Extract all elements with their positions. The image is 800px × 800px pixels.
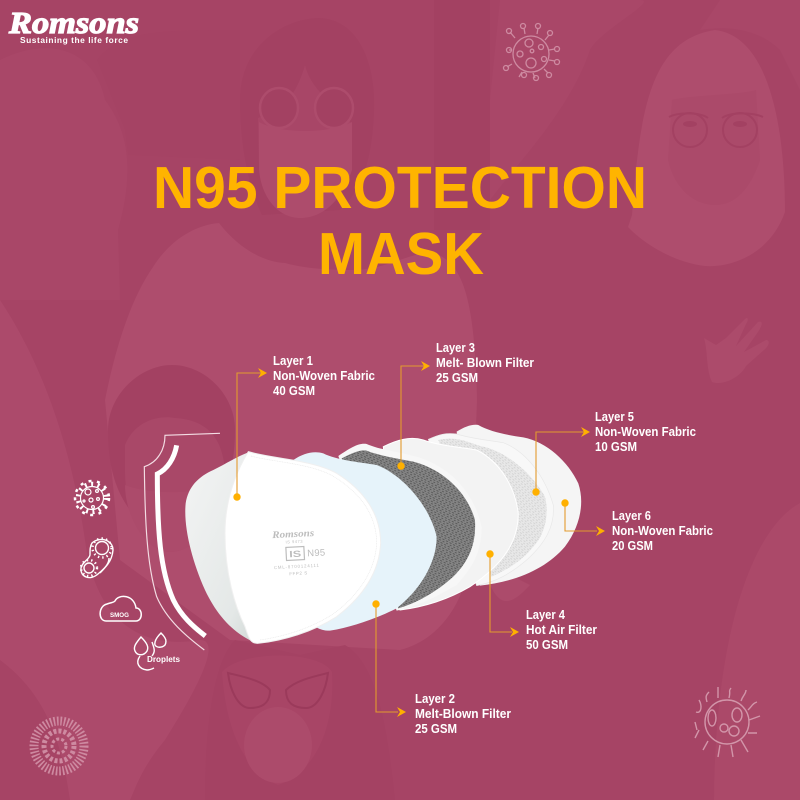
label: layer 5: Non-Woven Fabric	[595, 425, 696, 439]
label: layer 1: 40 GSM	[273, 384, 315, 398]
label: layer 2: 25 GSM	[415, 722, 457, 736]
label: layer 2: Melt-Blown Filter	[415, 707, 511, 721]
label: layer 4: Layer 4	[526, 608, 565, 622]
title	[153, 155, 647, 287]
layer 4	[383, 438, 518, 610]
label: layer 3: 25 GSM	[436, 371, 478, 385]
mask print: FFP2 S	[289, 570, 307, 576]
mask print: CML-8700124111	[274, 563, 320, 570]
label: layer 5: 10 GSM	[595, 440, 637, 454]
title: N95 PROTECTION	[153, 155, 647, 221]
central body	[105, 223, 477, 650]
title: MASK	[318, 221, 484, 287]
label: layer 6: 20 GSM	[612, 539, 653, 553]
layer 1	[185, 452, 381, 643]
icon: droplets	[134, 633, 181, 670]
logo: Sustaining the life force	[20, 35, 128, 45]
bottom woman	[205, 640, 395, 800]
virus icon bottom right	[695, 687, 760, 757]
leader lines	[237, 366, 597, 712]
label: layer 4	[526, 608, 597, 652]
virus icon top	[504, 24, 560, 80]
label: layer 4: 50 GSM	[526, 638, 568, 652]
label: layer 1	[273, 354, 375, 398]
layer 2	[293, 452, 437, 631]
exploded mask layers	[185, 425, 581, 643]
layer 3	[338, 444, 482, 611]
label: layer 1: Non-Woven Fabric	[273, 369, 375, 383]
icon: droplets: Droplets	[147, 655, 181, 664]
right woman	[628, 30, 785, 266]
layer 6	[457, 425, 581, 586]
mask print: N95	[307, 547, 325, 559]
mask print: Romsons	[271, 528, 315, 541]
shield outline	[144, 433, 220, 650]
central woman	[240, 18, 374, 215]
virus icon bottom left	[34, 721, 84, 771]
label: layer 4: Hot Air Filter	[526, 623, 597, 637]
label: layer 6	[612, 509, 713, 553]
afro person	[108, 365, 235, 510]
mask print: IS 9473	[285, 539, 303, 544]
label: layer 6: Non-Woven Fabric	[612, 524, 713, 538]
label: layer 3	[436, 341, 534, 385]
icon: smog cloud: SMOG	[110, 612, 129, 619]
label: layer 1: Layer 1	[273, 354, 313, 368]
label: layer 3: Melt- Blown Filter	[436, 356, 534, 370]
left lower body	[0, 300, 209, 800]
arrowheads	[258, 361, 605, 717]
label: layer 2: Layer 2	[415, 692, 455, 706]
layer 5	[428, 434, 553, 586]
icon: smog cloud	[100, 596, 141, 621]
label: layer 5	[595, 410, 696, 454]
icon: bacteria	[81, 538, 113, 578]
logo: Romsons	[8, 5, 139, 40]
leader dots	[233, 462, 569, 608]
icon: virus	[75, 481, 109, 515]
hand	[704, 318, 769, 383]
label: layer 6: Layer 6	[612, 509, 651, 523]
mask print	[271, 527, 326, 577]
label: layer 3: Layer 3	[436, 341, 475, 355]
mask print: IS	[289, 549, 301, 559]
label: layer 5: Layer 5	[595, 410, 634, 424]
label: layer 2	[415, 692, 511, 736]
